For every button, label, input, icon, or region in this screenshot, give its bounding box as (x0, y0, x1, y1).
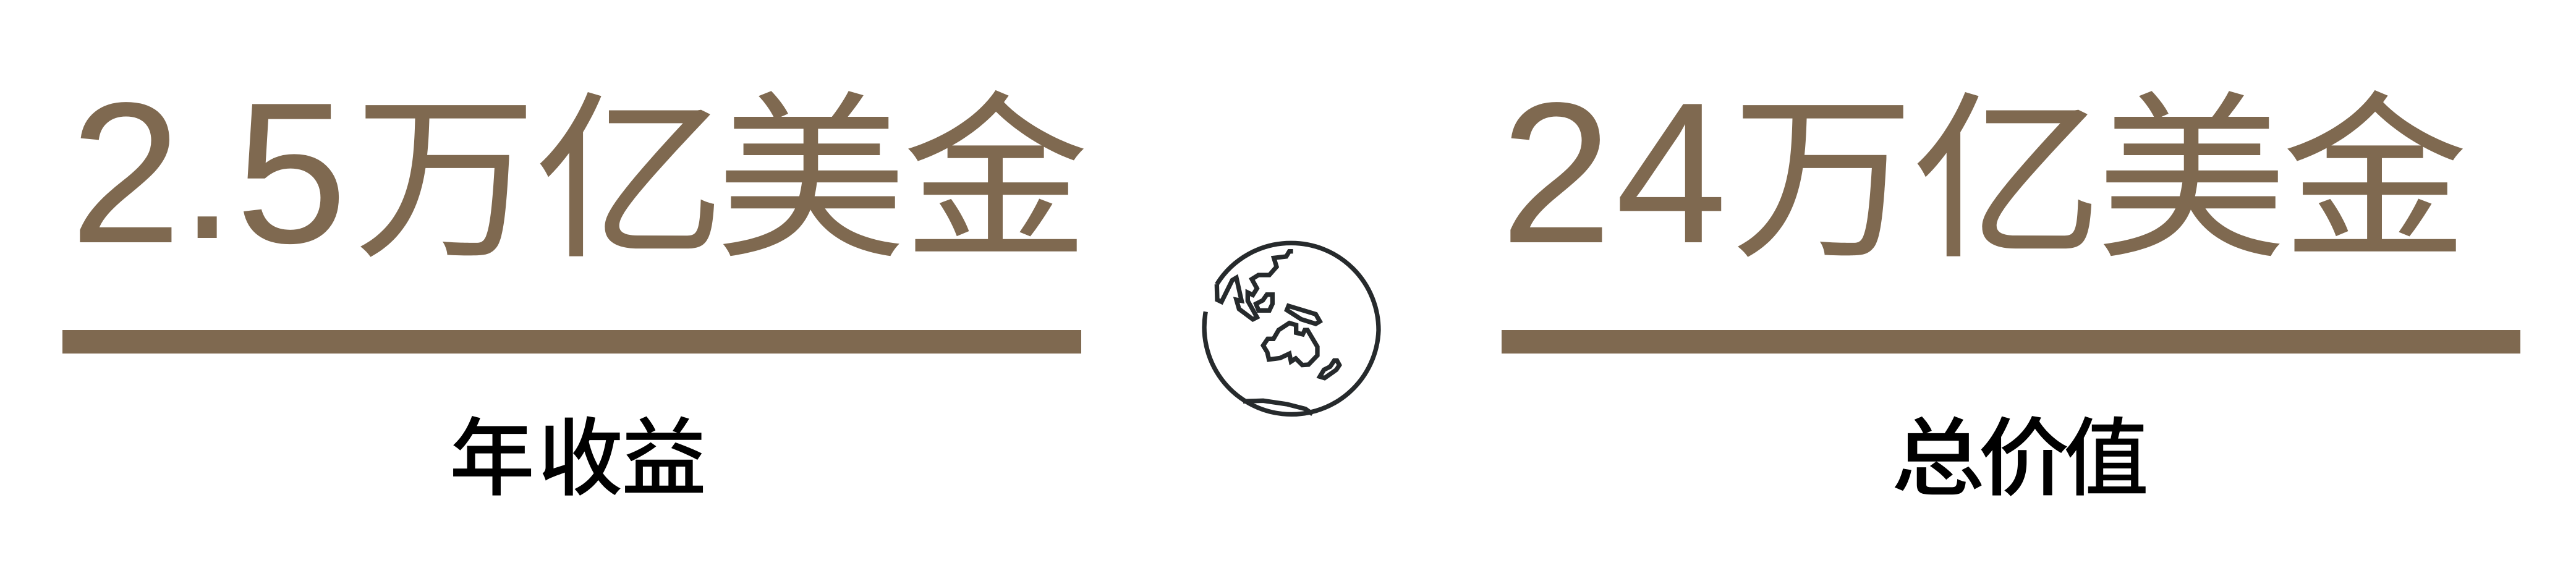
label: annual revenue: 年收益 (449, 412, 707, 507)
icon: globe (1204, 243, 1379, 414)
heading: 24 trillion USD: 金 (2282, 80, 2468, 281)
label: total value: 值 (2064, 412, 2149, 507)
heading: 2.5 trillion USD: . (179, 56, 235, 281)
heading: 24 trillion USD: 美 (2096, 80, 2287, 281)
heading: 24 trillion USD: 万 (1732, 81, 1915, 281)
heading: 2.5 trillion USD: 金 (903, 80, 1089, 281)
label: total value: 价 (1978, 412, 2070, 507)
heading: 24 trillion USD (1500, 61, 2468, 285)
heading: 2.5 trillion USD: 5 (236, 61, 347, 285)
panel: annual revenue (62, 56, 1089, 507)
panel: total value (1500, 61, 2520, 507)
heading: 24 trillion USD: 24 (1500, 61, 1727, 285)
heading: 2.5 trillion USD: 万 (354, 81, 537, 281)
heading: 2.5 trillion USD: 2 (70, 61, 182, 285)
bar: right divider (1502, 330, 2520, 354)
label: total value (1891, 411, 2149, 507)
heading: 2.5 trillion USD: 美 (715, 80, 907, 281)
heading: 2.5 trillion USD (70, 56, 1089, 285)
heading: 2.5 trillion USD: 亿 (534, 80, 726, 281)
label: total value: 总 (1891, 411, 1985, 506)
heading: 24 trillion USD: 亿 (1911, 80, 2103, 281)
bar: left divider (62, 330, 1081, 354)
